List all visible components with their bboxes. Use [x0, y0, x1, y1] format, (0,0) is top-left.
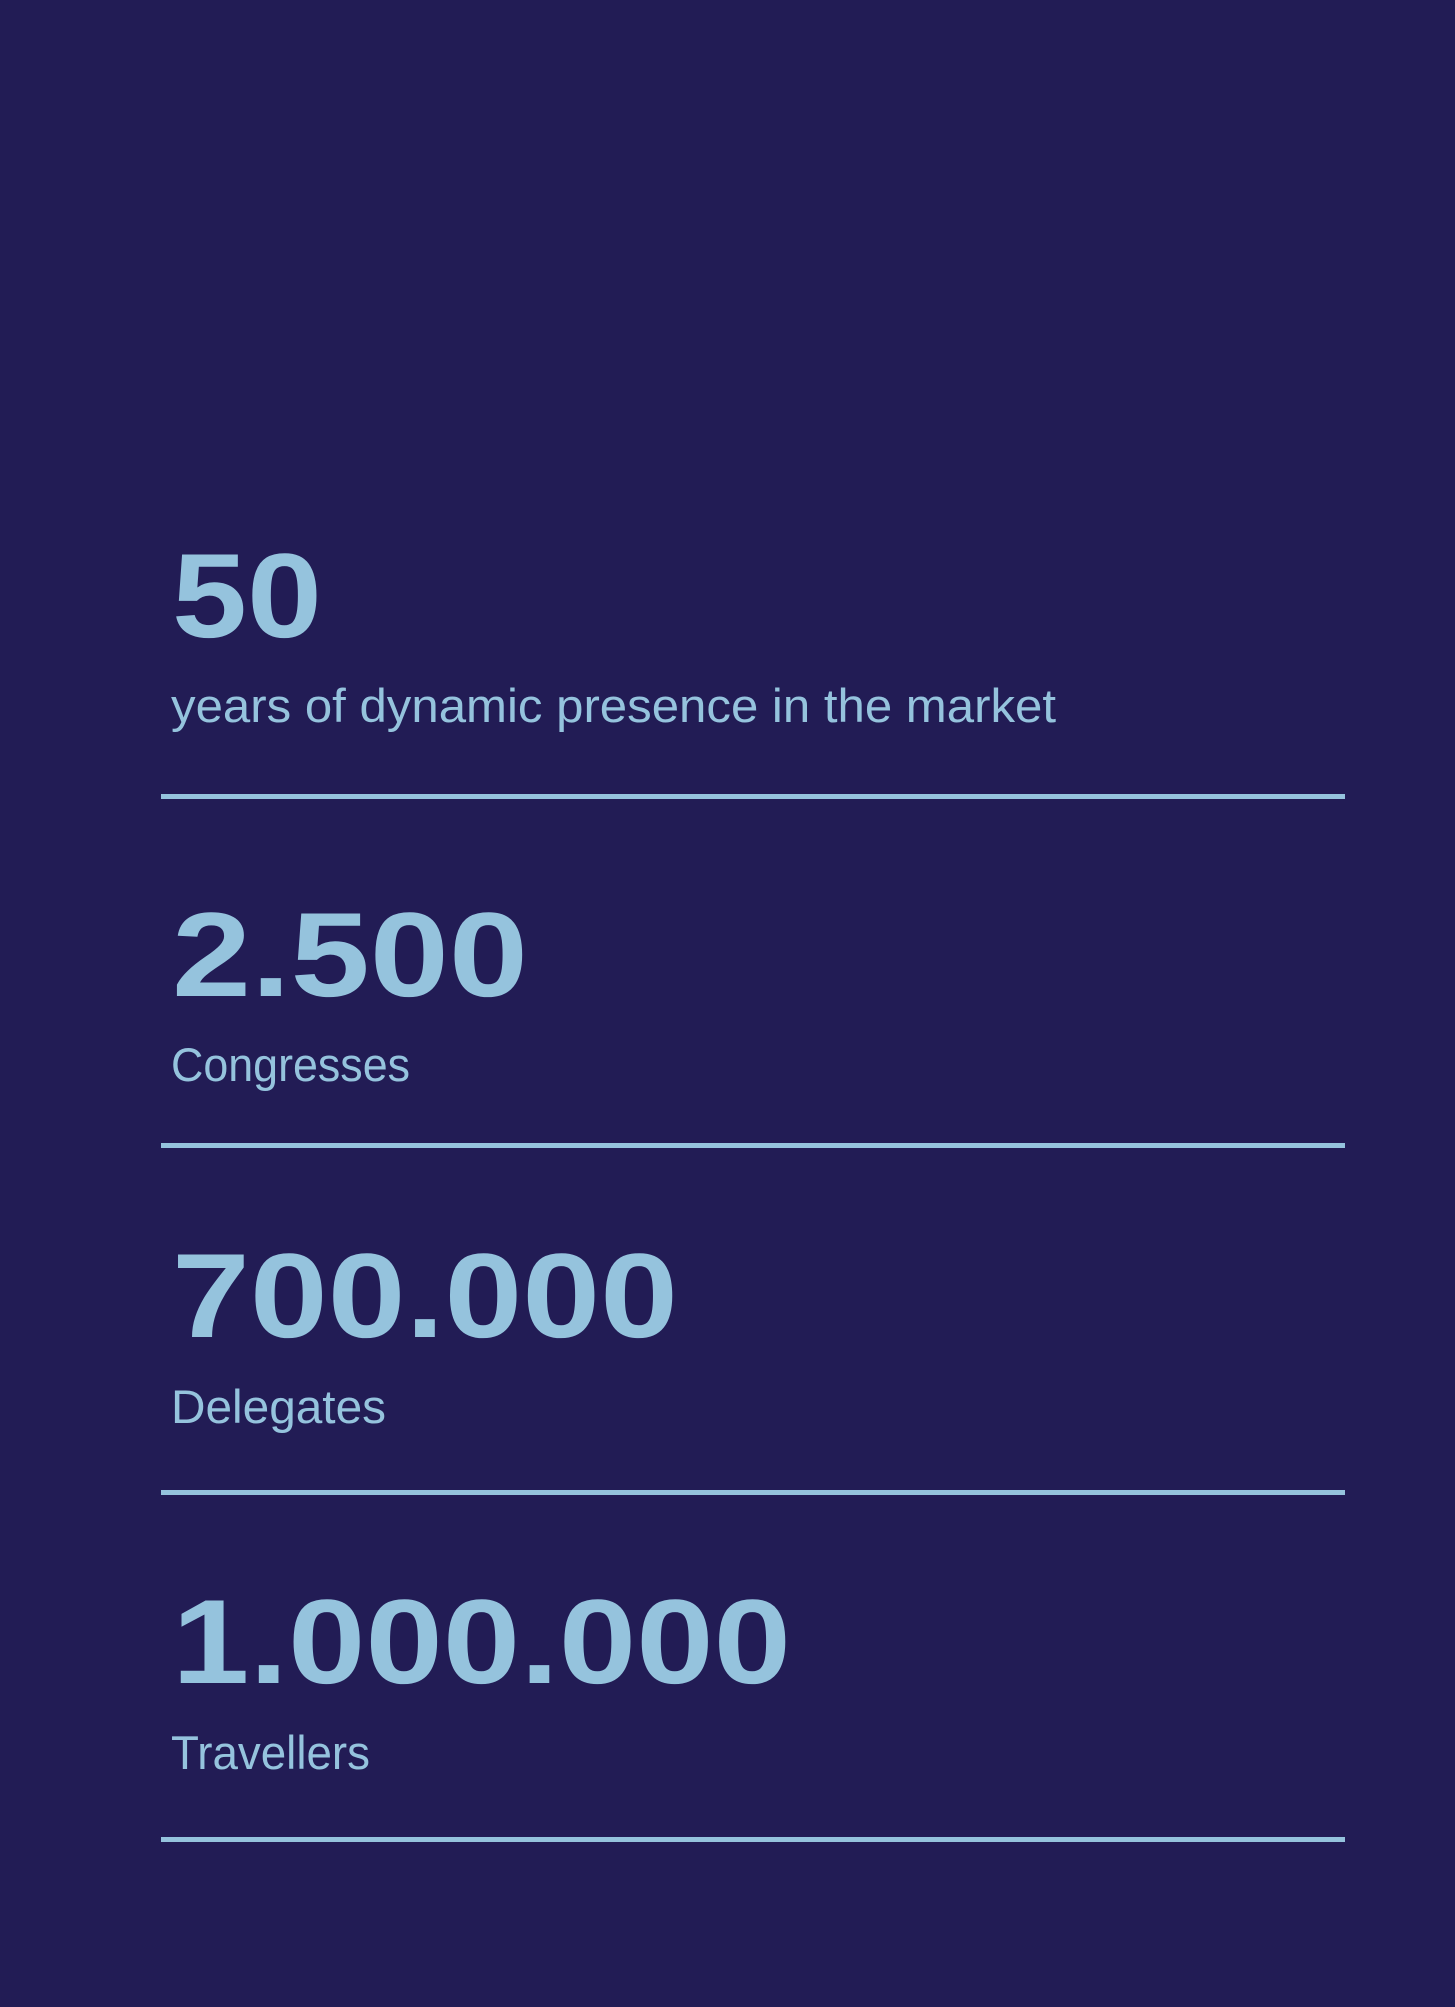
number: 2.500: 2.500: [172, 888, 528, 1022]
stat: congresses: [171, 888, 528, 1091]
number: 700.000: 700.000: [172, 1229, 678, 1363]
stat: delegates: [171, 1229, 678, 1433]
stat: 50 years: [171, 529, 1056, 732]
label: delegates: Delegates: [171, 1380, 386, 1433]
label: congresses: Congresses: [171, 1038, 410, 1091]
label: years: years of dynamic presence in the market: [171, 679, 1056, 732]
stat: travellers: [171, 1575, 791, 1779]
number: 50: 50: [172, 529, 322, 663]
number: 1.000.000: 1.000.000: [172, 1575, 791, 1709]
label: travellers: Travellers: [171, 1726, 370, 1779]
